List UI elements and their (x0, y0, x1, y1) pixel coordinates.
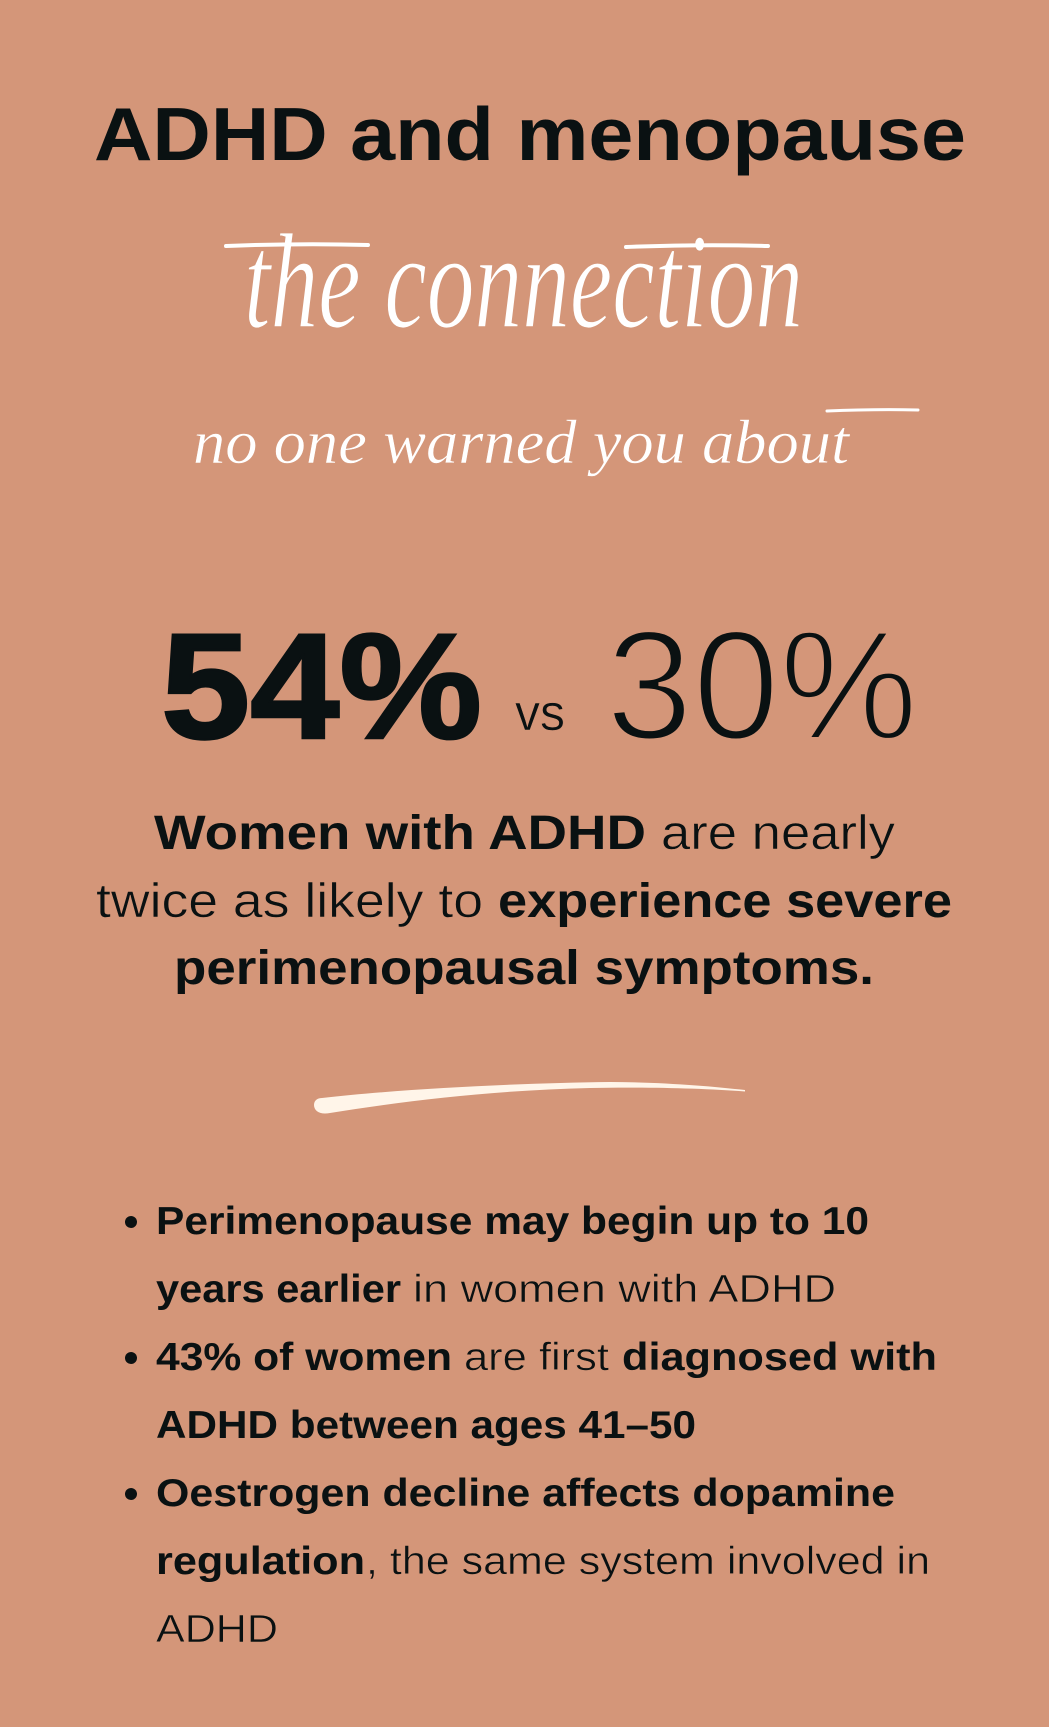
key finding text (96, 807, 952, 995)
script line: the connection: the connection (244, 207, 803, 357)
bullet 1 (125, 1200, 869, 1311)
stat: 30%: 30% (606, 599, 918, 773)
key finding text: experience severe (498, 875, 952, 928)
key finding text: are nearly (661, 807, 895, 860)
brush stroke divider (314, 1082, 745, 1114)
bullet 1: Perimenopause may begin up to 10 (156, 1200, 869, 1243)
bullet 1: in women with ADHD (413, 1268, 836, 1311)
statistic comparison (161, 599, 918, 773)
bullet 2 (125, 1336, 937, 1447)
bullet 3: , the same system involved in (366, 1540, 930, 1583)
key finding text: twice as likely to (96, 875, 483, 928)
bullet 3 (125, 1472, 930, 1651)
stat: 54%: 54% (161, 602, 482, 770)
bullet 3: regulation (156, 1540, 365, 1583)
bullet list (125, 1200, 937, 1651)
bullet 2: diagnosed with (622, 1336, 937, 1379)
bullet 3: ADHD (156, 1608, 278, 1651)
bullet 1: years earlier (156, 1268, 401, 1311)
bullet 3: Oestrogen decline affects dopamine (156, 1472, 895, 1515)
bullet 2: 43% of women (156, 1336, 452, 1379)
bullet 2: ADHD between ages 41–50 (156, 1404, 696, 1447)
key finding text: Women with ADHD (154, 807, 646, 860)
label: vs: vs (515, 684, 565, 741)
key finding text: perimenopausal symptoms. (174, 942, 874, 995)
script line: no one warned you about: no one warned you about (193, 409, 851, 477)
title: ADHD and menopause (94, 92, 966, 176)
flourish strokes (226, 244, 918, 411)
script subtitle (193, 207, 918, 477)
bullet 2: are first (464, 1336, 609, 1379)
